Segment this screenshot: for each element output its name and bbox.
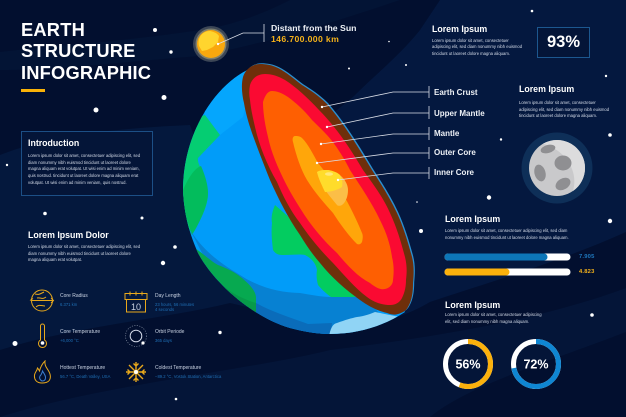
illustration: sun bbox=[193, 26, 229, 62]
stat: hottest temperature bbox=[60, 365, 110, 379]
introduction text bbox=[28, 153, 140, 185]
introduction text: diam nonummy nibh euismod tincidunt ut laoreet dolore bbox=[28, 160, 131, 165]
heading: moon: Lorem Ipsum bbox=[519, 84, 574, 94]
text: top right: tincidunt ut laoreet dolore magna aliquam. bbox=[432, 51, 510, 56]
title: EARTH bbox=[21, 18, 85, 40]
mantle layer bbox=[263, 91, 394, 289]
text: donuts bbox=[445, 312, 542, 324]
text: moon bbox=[519, 100, 609, 118]
text: moon: tincidunt ut laoreet dolore magna aliquam. bbox=[519, 113, 597, 118]
earth crust layer bbox=[242, 64, 414, 315]
label: upper mantle: Upper Mantle bbox=[434, 108, 485, 118]
text: top right: adipiscing elit, sed diam nonummy nibh euismod bbox=[432, 44, 522, 49]
illustration: earth cross-section bbox=[183, 63, 415, 334]
stat: core temperature: Core Temperature bbox=[60, 329, 100, 335]
heading: bars: Lorem Ipsum bbox=[445, 214, 500, 224]
icon: flame bbox=[34, 360, 51, 384]
stat: day length: Day Length bbox=[155, 293, 181, 299]
sun label: Distant from the Sun bbox=[271, 23, 356, 33]
stat: coldest temperature: Coldest Temperature bbox=[155, 365, 201, 371]
donut chart: 56% bbox=[443, 339, 493, 389]
stat: orbit periode: Orbit Periode bbox=[155, 329, 184, 335]
text: moon: Lorem ipsum dolor sit amet, consectetuer bbox=[519, 100, 596, 105]
label: inner core: Inner Core bbox=[434, 168, 474, 177]
stat: core radius: 6.371 km bbox=[60, 302, 77, 307]
stat: hottest temperature: Hottest Temperature bbox=[60, 365, 105, 371]
heading: donuts: Lorem Ipsum bbox=[445, 300, 500, 310]
text: bars bbox=[445, 228, 569, 240]
text: top right bbox=[432, 38, 522, 56]
stat: orbit periode bbox=[155, 329, 184, 343]
stat: day length: 23 hours, 56 minutes bbox=[155, 302, 194, 307]
title bbox=[21, 18, 151, 83]
introduction text: magna aliquam erat volutpat. Ut wisi enim ad minim veniam, bbox=[28, 166, 140, 171]
upper mantle layer bbox=[249, 74, 407, 305]
stat: orbit periode: 365 days bbox=[155, 338, 172, 343]
icon: thermometer bbox=[38, 324, 47, 348]
title accent bar bbox=[21, 89, 45, 92]
icon: snowflake bbox=[126, 362, 146, 382]
heading: lorem ipsum dolor: Lorem Ipsum Dolor bbox=[28, 230, 109, 240]
text: lorem ipsum dolor: magna aliquam erat volutpat. bbox=[28, 257, 82, 262]
text: lorem ipsum dolor: Lorem ipsum dolor sit amet, consectetuer adipiscing elit, sed bbox=[28, 244, 140, 249]
bar value: 7.905: 7.905 bbox=[579, 254, 595, 260]
donut chart: 72% bbox=[511, 339, 561, 389]
text: lorem ipsum dolor bbox=[28, 244, 140, 262]
introduction text: Lorem ipsum dolor sit amet, consectetuer adipiscing elit, sed bbox=[28, 153, 140, 158]
stat: coldest temperature: −89.2 °C, Vostok Station, Antarctica bbox=[155, 374, 221, 379]
text: moon: adipiscing elit, sed diam nonummy nibh euismod bbox=[519, 107, 609, 112]
donut chart: 72%: 72% bbox=[523, 358, 549, 372]
sun label bbox=[271, 23, 356, 44]
label: earth crust: Earth Crust bbox=[434, 88, 478, 96]
stat: core radius: Core Radius bbox=[60, 293, 88, 299]
heading: top right: Lorem Ipsum bbox=[432, 24, 487, 34]
donut chart: 56%: 56% bbox=[455, 358, 481, 372]
inner core bbox=[317, 170, 348, 206]
label: outer core: Outer Core bbox=[434, 148, 476, 157]
text: top right: Lorem ipsum dolor sit amet, consectetuer bbox=[432, 38, 509, 42]
bar chart bbox=[444, 254, 570, 276]
stat box: 93% bbox=[537, 27, 590, 58]
icon: day length calendar bbox=[124, 292, 148, 312]
title: INFOGRAPHIC bbox=[21, 62, 151, 83]
stat: day length bbox=[155, 293, 194, 312]
introduction text: quis nostrud. tincidunt ut laoreet dolore magna aliquam erat bbox=[28, 173, 138, 178]
stat: core temperature bbox=[60, 329, 100, 343]
stat: coldest temperature bbox=[155, 365, 222, 379]
introduction text: volutpat. Ut wisi enim ad minim veniam, quis nostrud. bbox=[28, 180, 127, 185]
icon: orbit bbox=[125, 325, 147, 347]
icon: core radius bbox=[30, 290, 54, 312]
stat box: 93%: 93% bbox=[547, 33, 580, 51]
introduction heading: Introduction bbox=[28, 138, 79, 148]
text: bars: Lorem ipsum dolor sit amet, consectetuer adipiscing elit, sed diam bbox=[445, 228, 567, 233]
outer core layer bbox=[293, 136, 363, 244]
stat: hottest temperature: 56.7 °C, Death Valley, USA bbox=[60, 374, 110, 379]
sun label: 146.700.000 km bbox=[271, 34, 339, 44]
text: bars: nonummy nibh euismod tincidunt ut laoreet dolore magna aliquam. bbox=[445, 235, 569, 240]
text: lorem ipsum dolor: diam nonummy nibh euismod tincidunt ut laoreet dolore bbox=[28, 251, 131, 256]
text: donuts: elit, sed diam nonummy nibh magna aliquam. bbox=[445, 319, 529, 324]
stat: core temperature: +6,000 °C bbox=[60, 338, 79, 343]
stat: core radius bbox=[60, 293, 88, 307]
text: donuts: Lorem ipsum dolor sit amet, consectetuer adipiscing bbox=[445, 312, 542, 317]
bar value: 4.823: 4.823 bbox=[579, 269, 595, 275]
panel: introduction bbox=[21, 131, 153, 196]
illustration: moon bbox=[522, 132, 592, 204]
blue rim of cut bbox=[243, 63, 415, 314]
stat: day length: 4 seconds bbox=[155, 307, 174, 312]
icon: day length calendar: 10 bbox=[131, 302, 141, 312]
label: mantle: Mantle bbox=[434, 129, 459, 138]
title: STRUCTURE bbox=[21, 40, 136, 61]
earth body bbox=[183, 70, 405, 334]
